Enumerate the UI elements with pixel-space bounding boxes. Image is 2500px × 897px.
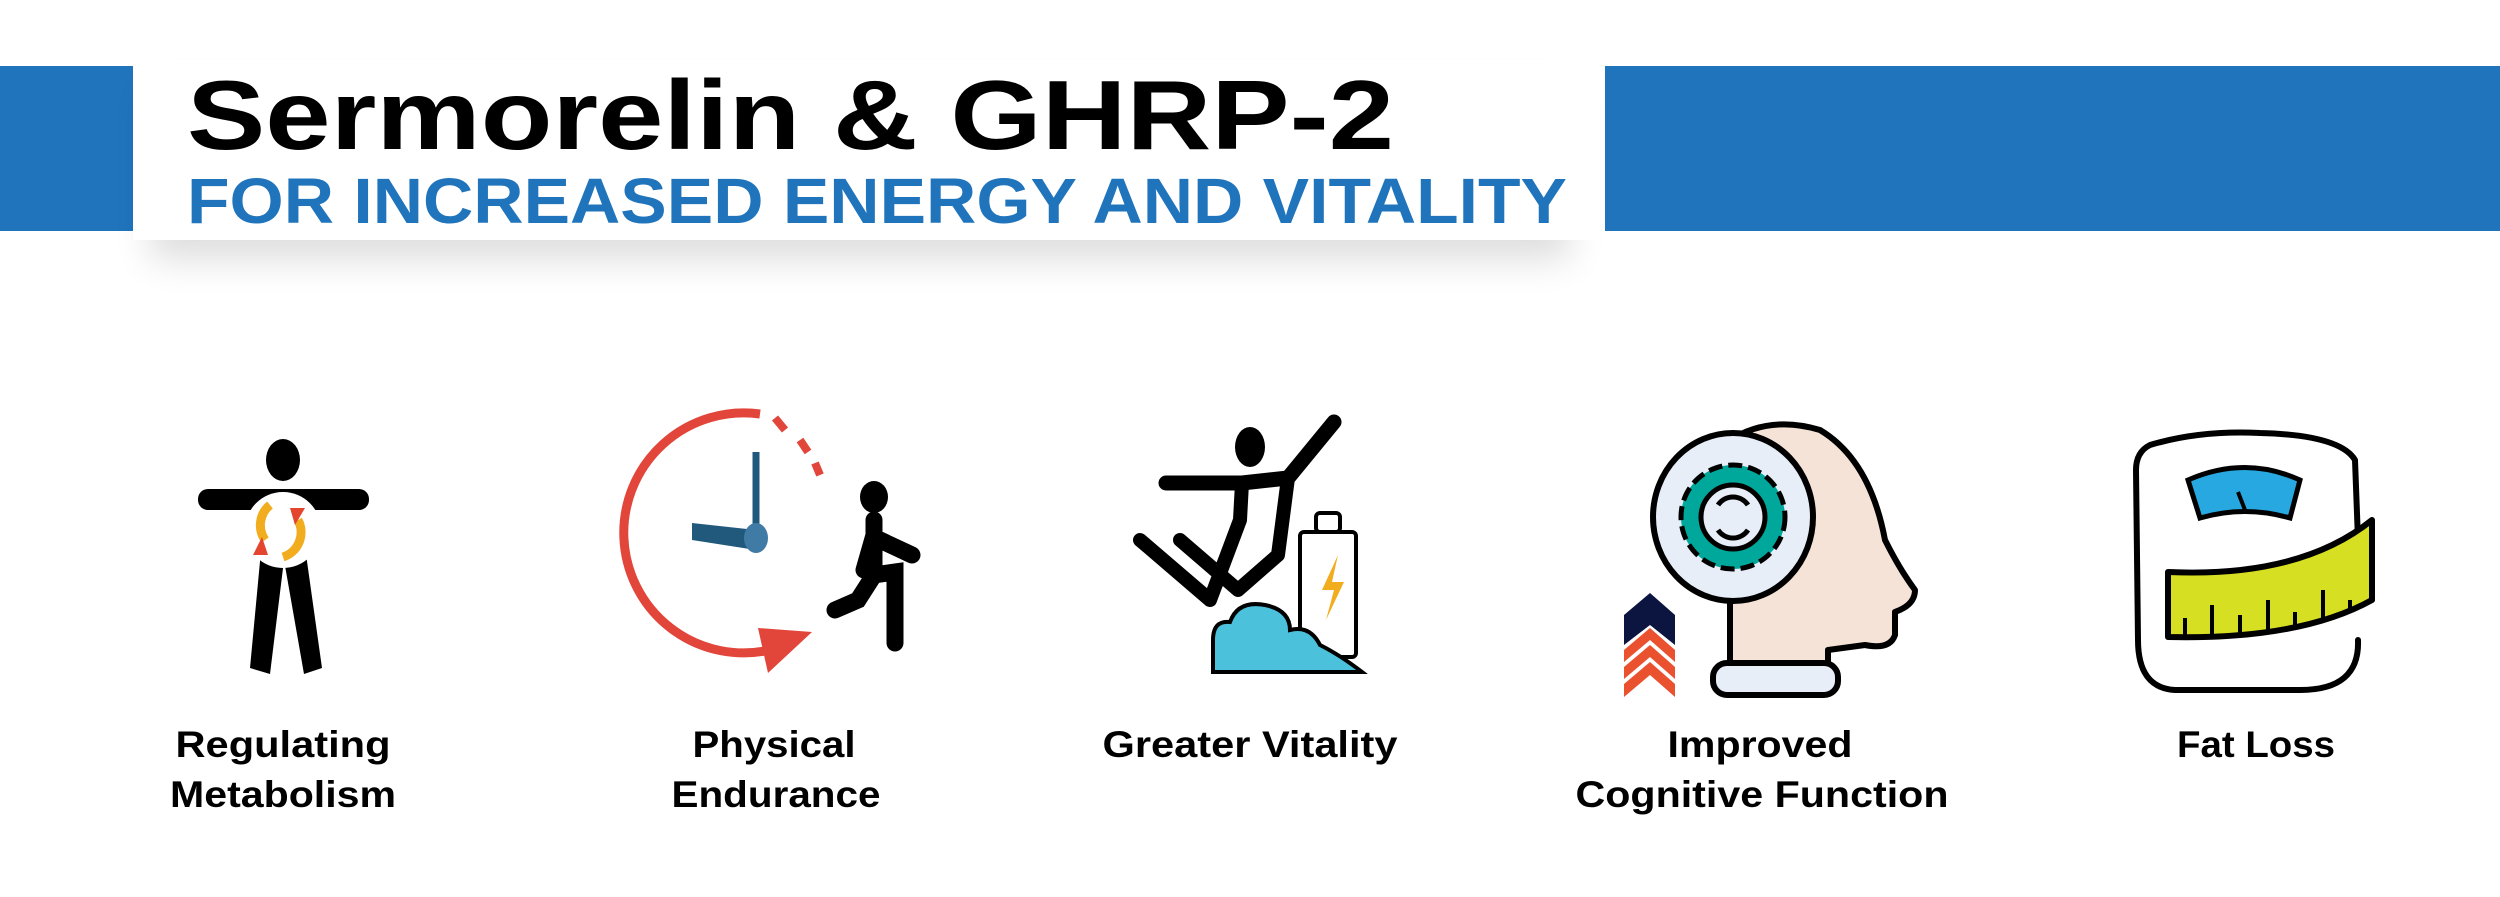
label: Fat Loss: Fat Loss [2177,724,2335,765]
icon: metabolism figure [198,439,369,674]
title: Sermorelin & GHRP-2 [187,60,1394,170]
label: Regulating Metabolism: Metabolism [170,774,396,815]
icon: jumper with battery and cloud [1140,422,1362,672]
header card [133,60,1600,260]
label: Regulating Metabolism [170,724,396,815]
header: right blue bar [1605,66,2500,231]
subtitle: FOR INCREASED ENERGY AND VITALITY [187,165,1567,237]
label: Improved Cognitive Function: Improved [1668,724,1852,765]
label: Greater Vitality: Greater Vitality [1102,724,1398,765]
label: Physical Endurance: Endurance [672,774,880,815]
header: left blue bar [0,66,133,231]
icon: head with gear [1624,424,1915,697]
label: Regulating Metabolism: Regulating [176,724,390,765]
label: Improved Cognitive Function: Cognitive Function [1576,774,1948,815]
icon: clock and walker [624,413,912,673]
label: Physical Endurance: Physical [692,724,856,765]
label: Improved Cognitive Function [1576,724,1948,815]
label: Physical Endurance [672,724,880,815]
icon: scale with measuring tape [2136,432,2372,690]
